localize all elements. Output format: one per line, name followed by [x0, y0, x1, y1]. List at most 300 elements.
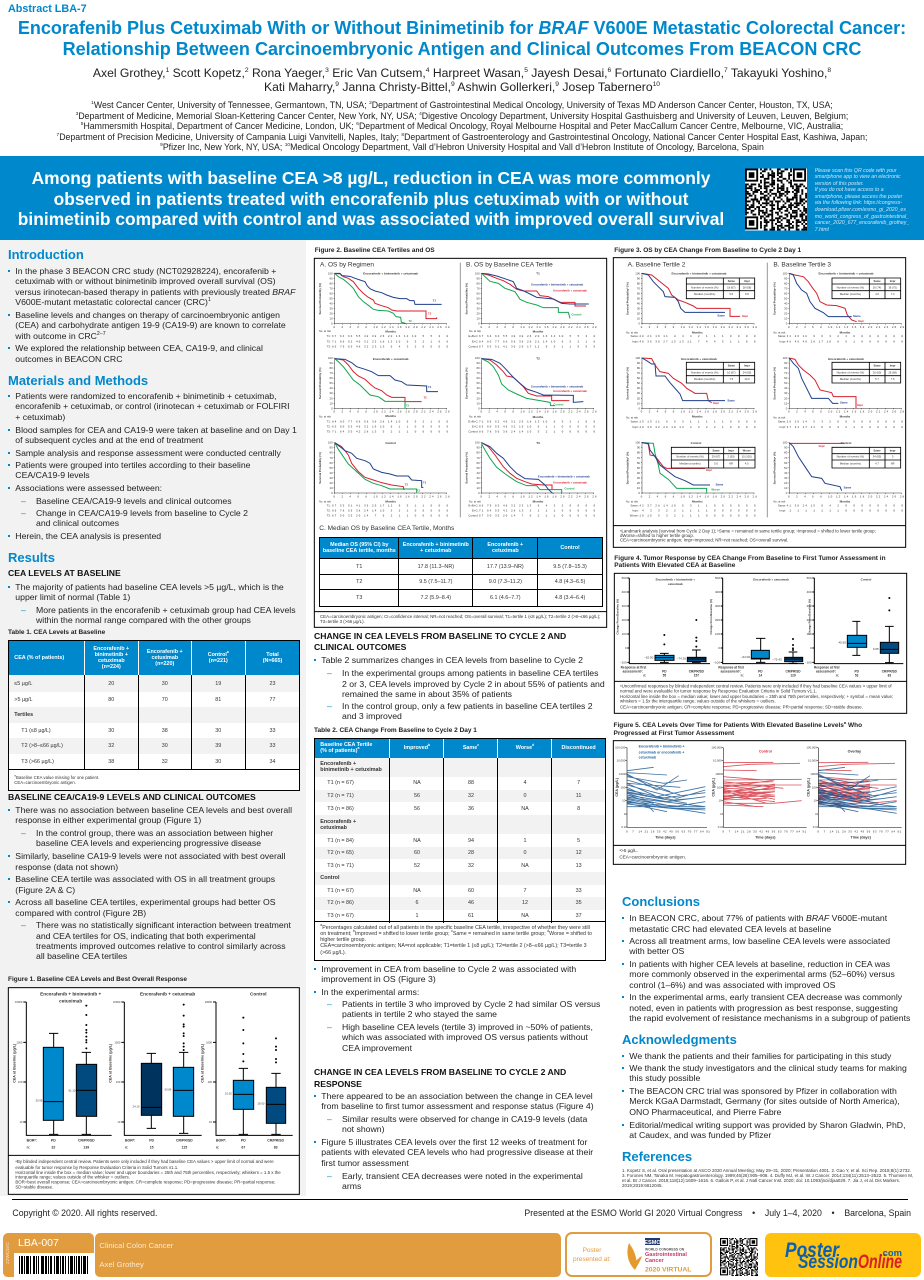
response bullet 1: There appeared to be an association between the change in CEA level [321, 1091, 593, 1101]
chart B3: tertile 3 by regimen: 0 [478, 491, 480, 495]
chart B3: tertile 3 by regimen: E+C: [472, 509, 479, 513]
baseline sub-bullet 1 [36, 828, 273, 849]
Table 1: Encorafenib + [147, 649, 183, 655]
chart A1: encorafenib + binimetinib + cetuximab by tertile: 40 [330, 302, 333, 306]
methods bullet 2: of subsequent cycles and at the end of treatment [15, 435, 203, 445]
acknowledgment bullet 2: We thank the study investigators and the clinical study teams for making [629, 1063, 907, 1073]
Figure 5 panel: 10 [622, 799, 626, 803]
Figure 1: box plots: 1000 [16, 1040, 23, 1044]
Table 1: 19 [215, 681, 221, 687]
chart B1: tertile 1 by regimen: E+C: [472, 339, 479, 343]
Figure 2C table: T1 [356, 564, 362, 570]
chart B2: tertile 2 by regimen: 50 [477, 381, 480, 385]
conclusion bullet 2: Across all treatment arms, low baseline CEA levels were associated [629, 936, 890, 946]
chart B1: tertile 1 by regimen: 90 [477, 276, 480, 280]
chart B3: tertile 3 by regimen: 90 [477, 446, 480, 450]
key message headline: Among patients with baseline CEA >8 µg/L, reduction in CEA was more commonly [32, 168, 710, 188]
chart A3: control by tertile: T3: [327, 514, 331, 518]
chart A2: E+C tertile 2: 70 [637, 371, 640, 375]
acknowledgment bullet 3: The BEACON CRC trial was sponsored by Pfizer in collaboration with [629, 1086, 897, 1096]
subheading: change in CEA and response [314, 1067, 566, 1089]
chart B2: tertile 2 by regimen: 30 [477, 391, 480, 395]
Figure 4 panel: : [642, 670, 643, 674]
chart B3: control tertile 3: (%) [773, 452, 777, 457]
methods bullet 4: Patients were grouped into tertiles according to their baseline [15, 460, 250, 470]
baseline sub-bullet 2: all baseline CEA tertiles [36, 951, 127, 961]
chart B1: tertile 1 by regimen: E+B+C: [468, 334, 479, 338]
chart A2: E+C tertile 2: No. at risk [626, 415, 639, 419]
chart A3: control tertile 2 [625, 441, 758, 518]
chart A1: E+B+C tertile 2: Number of events (%) [691, 285, 718, 289]
chart A1: E+B+C tertile 2: 10 [637, 317, 640, 321]
subheading: CEA levels at baseline: CEA LEVELS AT BASELINE [8, 568, 121, 578]
chart A2: E+C tertile 2: Same [728, 364, 735, 368]
chart B2: tertile 2 by regimen: Survival Probability (%) [465, 367, 469, 399]
reference list: 2019;2019:6812045. [622, 1183, 663, 1188]
chart B2: E+C tertile 3: Survival Probability [773, 373, 777, 400]
chart B2: tertile 2 by regimen: 20 [477, 396, 480, 400]
chart B3: control tertile 3: NR [891, 461, 895, 465]
chart A3: control by tertile: 70 [330, 456, 333, 460]
Table 1: Total [266, 652, 279, 658]
Table 2: 61 [468, 913, 474, 919]
OS sub-bullet 1: patients in tertile 2 who stayed the same [342, 1009, 497, 1019]
Figure 1: box plots: PD [149, 1138, 155, 1142]
intro bullet 3: We explored the relationship between CEA, CA19-9, and clinical [15, 343, 263, 353]
Figure 5 panel: 1 [815, 812, 817, 816]
chart B2: E+C tertile 3: 20 [784, 396, 788, 400]
results bullet 1: upper limit of normal (Table 1) [15, 592, 130, 602]
chart B3: control tertile 3: 4.7 [875, 461, 879, 465]
Table 2: NA [413, 780, 421, 786]
chart B2: tertile 2 by regimen: Encorafenib + binimetinib + cetuximab [531, 385, 583, 389]
Table 2: Encorafenib + [320, 819, 356, 825]
Figure 4 panel: 129 [790, 674, 796, 678]
methods sub-bullet 2: Change in CEA/CA19-9 levels from baseline to Cycle 2 [36, 508, 248, 518]
intro bullet 2: with outcome in CRC2–7 [15, 331, 106, 341]
Table 2: Discontinued [562, 745, 596, 751]
conclusion bullet 4: the rapid evolvement of resistance mechanisms in a subgroup of patients [629, 1013, 910, 1023]
chart A1: E+B+C tertile 2: Impr [744, 279, 750, 283]
chart A3: control by tertile: 20 [330, 481, 333, 485]
intro bullet 1: In the phase 3 BEACON CRC study (NCT02928224), encorafenib + [15, 266, 276, 276]
chart A1: encorafenib + binimetinib + cetuximab by tertile: Encorafenib + binimetinib + cetuximab [363, 272, 418, 276]
chart B1: E+B+C tertile 3: Impr: [780, 339, 786, 343]
chart A3: control by tertile: 30 [330, 476, 333, 480]
footer: congress logo box: Gastrointestinal [645, 1252, 687, 1258]
chart B2: E+C tertile 3: 0 [786, 406, 788, 410]
Figure 5 panel: 1000 [810, 772, 817, 776]
QR instructions: mo_world_congress_of_gastrointestinal_ [815, 214, 909, 220]
Figure 1: box plots: Horizontal line inside the box = median value; lower and upper boundaries = 25th and 75th percentiles, respectively; whiskers = 1.5 x the [15, 1170, 281, 1175]
Figure 1: box plots: 1000 [206, 1040, 213, 1044]
Figure 4 caption: Figure 4. Tumor Response by CEA Change From Baseline to First Tumor Assessment in [614, 555, 886, 562]
response sub-bullet 2: arms [342, 1181, 361, 1191]
chart B3: tertile 3 by regimen: 0 2 4 6 8 10 12 14 16 18 20 22 24 26 28 [480, 495, 598, 498]
chart A1: encorafenib + binimetinib + cetuximab by tertile: T3 [408, 319, 412, 323]
chart A2: encorafenib + cetuximab by tertile: 10 [330, 401, 333, 405]
chart A3: control tertile 2: 60 [637, 461, 640, 465]
Figure 4 panel: assessment [623, 670, 641, 674]
Figure 4 panel: 500 [622, 576, 627, 580]
Table 1: CEA=carcinoembryonic antigen. [14, 780, 76, 785]
Table 2: 1 [523, 838, 526, 844]
chart B3: tertile 3 by regimen: 86 79 65 48 32 23 13 6 4 3 2 0 0 0 0 [476, 505, 596, 508]
Figure 1: box plots: n: [27, 1146, 30, 1150]
chart B2: tertile 2 by regimen: 80 [477, 366, 480, 370]
chart A1: E+B+C tertile 2: 5.6 [729, 292, 734, 296]
chart A2: E+C tertile 2: Median (months) [694, 377, 715, 381]
affiliations: 7Department of Precision Medicine, University of Campania Luigi Vanvitelli, Naples, Italy; 8Department of Gastroenterology and Gastrointestinal Oncology, National Cancer Center Hospital East, Kashiwa, Japan; [57, 132, 867, 142]
chart A2: E+C tertile 2: 80 [637, 366, 640, 370]
chart A3: control tertile 2: No. at risk [626, 500, 639, 504]
Figure 4 panel: −100 [713, 660, 720, 664]
Figure 2 footnote: T3=tertile 3 (>66 µg/L). [320, 619, 365, 624]
Figure 4 panel: normal and were evaluable for tumor response by Response Evaluation Criteria in Solid Tumors v1.1. [620, 689, 817, 694]
Table 1: (N=665) [263, 658, 282, 664]
subheading: change in CEA and clinical outcomes [314, 631, 566, 652]
chart B1: E+B+C tertile 3: Number of events (%) [837, 285, 864, 289]
Figure 4 panel: Response at first [814, 665, 841, 669]
Table 2: 32 [468, 862, 474, 868]
chart A2: encorafenib + cetuximab by tertile: T3: [327, 430, 331, 434]
chart B1: tertile 1 by regimen: 0 2 4 6 8 10 12 14 16 18 20 22 24 26 28 [480, 326, 598, 329]
Figure 4 panel: Unconfirmed responses by blinded independent central review. Patients were only included if they had baseline CEA values > upper limit of [622, 684, 892, 689]
chart A1: encorafenib + binimetinib + cetuximab by tertile: 10 [330, 317, 333, 321]
footer: PosterSessionOnline logo: Session [798, 1252, 858, 1273]
Table 2: on treatment; bImproved = shifted to lower tertile group; cSame = remained in same tertile group; dWorse = shifted to [320, 929, 592, 937]
response sub-bullet 1 [342, 1114, 587, 1135]
chart B2: E+C tertile 3: Median (months) [840, 377, 861, 381]
chart B3: control tertile 3: 41 36 24 15 9 4 2 0 0 0 0 0 0 0 0 [784, 505, 904, 508]
Figure 5 panel: a [619, 848, 621, 852]
chart B2: E+C tertile 3: 37 34 27 21 9 6 3 2 1 0 0 0 0 0 0 [784, 426, 904, 429]
Figure 1: box plots: CR/PR/SD [267, 1138, 284, 1142]
Figure 5 panel: 100 [812, 785, 817, 789]
OS sub-bullet 2: High baseline CEA levels (tertile 3) improved in ~50% of patients, [342, 1022, 593, 1032]
chart A2: E+C tertile 2: Same [727, 398, 735, 402]
footer: PosterSessionOnline logo: Online [858, 1252, 902, 1273]
chart B1: tertile 1 by regimen: Encorafenib + binimetinib + cetuximab [531, 283, 583, 287]
Figure 2C table: Control [560, 545, 580, 551]
footer: PosterSessionOnline logo: .com [880, 1248, 902, 1258]
chart B2: E+C tertile 3 [773, 356, 905, 429]
chart A2: E+C tertile 2: 20 [637, 396, 640, 400]
Figure 4 panel: 0 [718, 646, 720, 650]
intro bullet 2: (CEA) and carbohydrate antigen 19-9 (CA19-9) are known to correlate [15, 320, 286, 330]
Figure 1: box plots: 10000 [113, 1000, 121, 1004]
Table 2: 56 [414, 793, 420, 799]
Figure 4 panel: a [620, 684, 622, 688]
Figure 1: box plots: 100 [116, 1080, 121, 1084]
Figure 4 panel: 0 [625, 646, 627, 650]
chart B1: tertile 1 by regimen: 30 [477, 307, 480, 311]
Figure 1: box plots: 10 [19, 1120, 23, 1124]
Table 2: Baseline CEA Tertile [320, 742, 372, 748]
chart A3: control tertile 2: 100 [635, 441, 640, 445]
Table 2: 37 [576, 913, 582, 919]
Table 1: 33 [270, 743, 276, 749]
chart B3: control tertile 3: 34 (85) [873, 455, 881, 459]
chart A1: E+B+C tertile 2: 50 [637, 297, 640, 301]
Figure 2C table: baseline CEA tertile, months [323, 548, 396, 554]
chart A2: encorafenib + cetuximab by tertile: T2 [423, 396, 427, 400]
footer: congress logo box: Cancer [645, 1258, 665, 1264]
reference list [622, 1168, 913, 1188]
Figure 5 panel: 10,000 [808, 759, 817, 763]
Figure 4 panel: Control [861, 578, 871, 582]
Figure 1: box plots: CEA at Baseline (µg/L) [12, 1043, 16, 1083]
baseline bullet 1: There was no association between baseline CEA levels and best overall [15, 805, 292, 815]
QR instructions: smartphone, please access the poster [815, 194, 902, 200]
heading: Materials and Methods: Materials and Methods [8, 373, 148, 388]
authors: Axel Grothey,1 Scott Kopetz,2 Rona Yaeger,3 Eric Van Cutsem,4 Harpreet Wasan,5 Jayesh Desai,6 Fortunato Ciardiello,7 Takayuki Yoshino,8 [93, 66, 831, 80]
chart A1: E+B+C tertile 2: 8.8 [745, 292, 749, 296]
OS sub-bullet 2: CEA improvement [342, 1043, 412, 1053]
Figure 3 footnote: dWorse=shifted to higher tertile group. [620, 533, 694, 538]
conclusion bullet 1: metastatic CRC had elevated CEA levels at baseline [629, 924, 831, 934]
Figure 5 panel: 0.1 [718, 825, 722, 829]
Table 2: 12 [522, 900, 528, 906]
chart B1: E+B+C tertile 3: Encorafenib + binimetinib + cetuximab [818, 272, 874, 276]
chart A3: control by tertile: Survival Probability (%) [318, 452, 322, 484]
footer: congress logo box: Poster [583, 1247, 602, 1254]
Figure 4 panel: 300 [622, 604, 627, 608]
chart B3: tertile 3 by regimen: 60 [477, 461, 480, 465]
Table 1: >5 µg/L [14, 697, 33, 703]
chart B2: E+C tertile 3: 80 [784, 366, 788, 370]
Figure 1: box plots: 28.00 [258, 1102, 265, 1106]
Table 1: aBaseline CEA value missing for one patient. [14, 773, 99, 780]
chart B2: tertile 2 by regimen: 71 66 62 46 31 25 18 13 10 6 5 2 1 0 0 [476, 420, 596, 423]
chart B3: tertile 3 by regimen [465, 441, 598, 518]
methods sub-bullet 1: Baseline CEA/CA19-9 levels and clinical outcomes [36, 496, 232, 506]
chart A3: control by tertile: 86 78 56 38 24 14 10 5 2 1 0 0 0 0 0 [329, 510, 449, 513]
OS sub-bullet 1 [342, 999, 600, 1020]
panel: left column background [0, 240, 306, 1196]
chart A2: E+C tertile 2: 7.5 [729, 377, 734, 381]
Table 2: T1 (n = 67) [327, 888, 354, 894]
chart B1: E+B+C tertile 3: Survival Probability [773, 289, 777, 315]
chart A1: encorafenib + binimetinib + cetuximab by tertile: No. at risk [319, 329, 332, 333]
Figure 4 panel: 14 [759, 674, 762, 678]
QR instructions: If you do not have access to a [815, 187, 884, 193]
Figure 5 panel: Control [759, 750, 772, 754]
chart A2: E+C tertile 2: Impr [713, 401, 720, 405]
chart A1: encorafenib + binimetinib + cetuximab by tertile: T1 [433, 299, 436, 303]
chart A2: E+C tertile 2: Number of events (%) [691, 370, 718, 374]
response bullet 2: patients with elevated CEA levels who had progressive disease at their [321, 1147, 593, 1157]
Figure 2C table: + cetuximab [420, 548, 451, 554]
chart A1: E+B+C tertile 2 [625, 271, 758, 343]
chart B2: E+C tertile 3: 30 [784, 391, 788, 395]
chart A3: control by tertile: 67 55 51 41 36 29 17 12 9 5 1 1 0 0 0 [329, 505, 449, 508]
chart B1: tertile 1 by regimen [465, 271, 598, 349]
chart B3: control tertile 3: Months [840, 500, 851, 504]
chart B1: tertile 1 by regimen: Control: [468, 345, 479, 349]
chart B1: E+B+C tertile 3: 10 [784, 317, 788, 321]
Figure 4 panel: 400 [807, 590, 812, 594]
Table 2: 0 [523, 793, 526, 799]
chart A3: control tertile 2: 42 37 28 14 10 6 3 1 1 0 0 0 0 0 0 [637, 505, 757, 508]
chart B1: E+B+C tertile 3: 48 46 40 28 17 10 8 6 1 0 0 0 0 0 0 [784, 340, 904, 343]
Figure 1: box plots: PD [51, 1138, 56, 1142]
reference list: et al. Br J Cancer. 2018;118(12):1609–1616. 6. Gallois P, et al. J Natl Cancer Inst. 2020; doi: 10.1093/jnci/djaa029. 7. Jia J, et al. Dis Markers. [622, 1178, 900, 1183]
chart A2: encorafenib + cetuximab by tertile: 90 [330, 361, 333, 365]
chart A3: control by tertile: 67 50 35 20 14 7 6 2 1 1 0 0 0 0 0 [329, 515, 449, 518]
Table 2: 52 [414, 862, 420, 868]
chart A3: control tertile 2: 40 [637, 471, 640, 475]
chart B3: control tertile 3: 0 [892, 455, 894, 459]
Figure 1: box plots: Control [250, 991, 267, 996]
results bullet 1: The majority of patients had baseline CEA levels >5 µg/L, which is the [15, 582, 284, 592]
Figure 1: box plots: 51.00 [225, 1092, 232, 1096]
Table 2: T2 (n = 86) [327, 900, 354, 906]
Figure 4 panel: −75.43 [772, 657, 782, 661]
chart A2: E+C tertile 2: 10 [637, 401, 640, 405]
chart B1: tertile 1 by regimen: 60 [477, 291, 480, 295]
chart A2: encorafenib + cetuximab by tertile: 0 [331, 406, 333, 410]
Figure 1: box plots: CR/PR/SD [176, 1138, 193, 1142]
Table 2: T1 (n = 84) [327, 838, 354, 844]
affiliations [56, 100, 867, 152]
OS sub-bullet 2 [342, 1022, 593, 1053]
Figure 3: landmark Kaplan-Meier charts [612, 257, 906, 548]
Figure 1: box plots: 10 [209, 1120, 213, 1124]
Table 1: 34 [270, 759, 276, 765]
change sub-bullet 1 [342, 668, 605, 699]
chart B2: E+C tertile 3: Impr [857, 403, 864, 407]
chart B3: tertile 3 by regimen: 50 [477, 466, 480, 470]
Figure 4 panel: whiskers = 1.5x the interquartile range; values outside of the whiskers = outliers. [620, 699, 776, 704]
Figure 5 panel: 0 7 14 21 28 35 42 49 56 63 70 77 84 91 [626, 831, 710, 834]
chart B1: tertile 1 by regimen: 67 64 63 55 48 38 26 20 16 14 10 5 5 3 0 [476, 335, 596, 338]
chart A1: encorafenib + binimetinib + cetuximab by tertile: 100 [328, 271, 333, 275]
footer: congress logo box: 2020 VIRTUAL [645, 1266, 691, 1274]
QR instructions: 7.html [815, 227, 829, 233]
Figure 4 panel: a [641, 671, 643, 673]
chart A2: E+C tertile 2: 30 [637, 391, 640, 395]
chart A1: encorafenib + binimetinib + cetuximab by tertile: Survival Probability (%) [318, 283, 322, 314]
Table 2: 36 [468, 806, 474, 812]
chart B2: E+C tertile 3: Number of events (%) [837, 370, 864, 374]
chart A2: encorafenib + cetuximab by tertile: T1 [428, 385, 432, 389]
baseline sub-bullet 2: and CEA tertiles for OS, indicating that both experimental [36, 931, 256, 941]
methods bullet 4 [15, 460, 250, 481]
Table 2: 13 [576, 862, 582, 868]
chart A3: control tertile 2: 10 10 5 3 2 1 1 1 0 0 0 0 0 0 0 [637, 515, 757, 518]
Figure 4 caption: Patients With Elevated CEA at Baseline [614, 562, 735, 569]
chart A1: E+B+C tertile 2: Median (months) [694, 292, 715, 296]
chart B2: tertile 2 by regimen: 65 60 55 46 32 19 10 6 1 1 0 0 0 0 0 [476, 426, 596, 429]
conclusion bullet 1: In BEACON CRC, about 77% of patients with BRAF V600E-mutant [629, 913, 887, 923]
Table 1: 39 [215, 743, 221, 749]
footer: PosterSessionOnline logo [765, 1233, 921, 1277]
Figure 2 footnote: CEA=carcinoembryonic antigen; CI=confidence interval; NR=not reached; OS=overall survival; T1=tertile 1 (≤8 µg/L); T2=tertile 2 (>8–≤66 µg/L); [320, 614, 600, 619]
chart B1: tertile 1 by regimen: 20 [477, 312, 480, 316]
chart B1: E+B+C tertile 3: Months [840, 330, 851, 334]
Figure 5 panel: Overlay [848, 750, 862, 754]
methods bullet 3: Sample analysis and response assessment were conducted centrally [15, 448, 281, 458]
chart A3: control tertile 2: 90 [637, 446, 640, 450]
Table 2: 88 [468, 780, 474, 786]
change sub-bullet 1: 2 or 3, CEA levels improved by Cycle 2 in about 55% of patients and [342, 678, 605, 688]
Figure 1: box plots: interquartile range; values outside of the whisker = outliers. [15, 1175, 130, 1180]
Figure 4 panel: 100 [715, 632, 720, 636]
Figure 2C table: cetuximab [492, 548, 519, 554]
Figure 5 panel: Time (days) [851, 836, 872, 840]
conclusion bullet 4: noted, even in patients with progression as best response, suggesting [629, 1002, 898, 1012]
conclusion bullet 4: In the experimental arms, early transient CEA decrease was commonly [629, 992, 902, 1002]
methods bullet 5: Associations were assessed between: [15, 483, 162, 493]
QR instructions: download.pfizer.com/esmo_gi_2020_es [815, 207, 906, 213]
baseline sub-bullet 2: treatments improved outcomes relative to control similarly across [36, 941, 286, 951]
chart B2: E+C tertile 3: a [774, 371, 776, 373]
Figure 1: box plots: BOR [216, 1138, 224, 1142]
chart B1: tertile 1 by regimen: Encorafenib + cetuximab [553, 288, 587, 292]
reference list: 1. Kopetz S, et al. Oral presentation at ASCO 2020 Annual Meeting; May 29–31, 2020; Presentation 4001. 2. Gao Y, et al. Sci Rep. 2018;8(1):2732. [622, 1168, 911, 1173]
Figure 2: Kaplan-Meier charts: B. OS by Baseline CEA Tertile [466, 262, 553, 269]
chart A1: E+B+C tertile 2: 100 [635, 271, 640, 275]
chart A1: encorafenib + binimetinib + cetuximab by tertile: 80 [330, 281, 333, 285]
Figure 2C table: 6.1 (4.6–7.7) [490, 595, 521, 601]
chart A2: E+C tertile 2: 40 [637, 386, 640, 390]
methods bullet 2 [15, 425, 297, 446]
Table 2: 46 [468, 900, 474, 906]
chart B2: tertile 2 by regimen: Encorafenib + cetuximab [553, 389, 587, 393]
Figure 3 footnote: CEA=carcinoembryonic antigen; Impr=improved; NR=not reached; OS=overall survival. [620, 537, 788, 542]
OS bullet 1: Improvement in CEA from baseline to Cycle 2 was associated with [321, 964, 576, 974]
chart A1: E+B+C tertile 2: 28 (68) [743, 285, 751, 289]
chart B3: control tertile 3: 0 2 4 6 8 10 12 14 16 18 20 22 24 26 28 [788, 495, 905, 498]
key message headline: observed in patients treated with encorafenib plus cetuximab with or without [54, 189, 688, 209]
Table 1: T2 (>8–≤66 µg/L) [21, 743, 63, 749]
chart B1: tertile 1 by regimen: 80 [477, 281, 480, 285]
affiliations: 9Pfizer Inc, New York, NY, USA; 10Medical Oncology Department, Vall d’Hebron University Hospital and Vall d’Hebron Institute of Oncology, Barcelona, Spain [160, 142, 764, 152]
chart B1: E+B+C tertile 3: 70 [784, 286, 788, 290]
Table 2: 11 [576, 793, 581, 799]
Figure 5 panel: 10,000 [617, 759, 626, 763]
chart B2: E+C tertile 3: 0 2 4 6 8 10 12 14 16 18 20 22 24 26 28 [788, 411, 905, 414]
chart A2: E+C tertile 2 [625, 356, 758, 429]
response sub-bullet 2: Early, transient CEA decreases were noted in the experimental [342, 1171, 583, 1181]
footer: congress logo box: WORLD CONGRESS ON [645, 1248, 685, 1252]
Figure 1: box plots: BOR=best overall response; CEA=carcinoembryonic antigen; CR=complete response; PD=progressive disease; PR=partial response; [15, 1180, 275, 1185]
change sub-bullet 2: In the control group, only a few patients in baseline CEA tertiles 2 [342, 701, 593, 711]
QR instructions [814, 168, 909, 233]
chart A2: encorafenib + cetuximab by tertile: 20 [330, 396, 333, 400]
Figure 1: box plots: : [36, 1138, 37, 1142]
Figure 5 panel: >5 µg/L. [621, 848, 638, 853]
intro bullet 3 [15, 343, 263, 364]
chart B2: tertile 2 by regimen: T2 [536, 356, 540, 360]
chart B1: tertile 1 by regimen: 50 [477, 297, 480, 301]
chart B2: tertile 2 by regimen: 90 [477, 361, 480, 365]
chart B3: tertile 3 by regimen: 10 [477, 486, 480, 490]
Figure 4 panel: Encorafenib + binimetinib + [656, 578, 695, 582]
chart A2: E+C tertile 2: 10.0 [744, 377, 750, 381]
presented at: Presented at the ESMO World GI 2020 Virtual Congress • July 1–4, 2020 • Barcelona, Spain [524, 1208, 911, 1218]
Table 2: (>66 µg/L). [320, 950, 346, 956]
chart A1: E+B+C tertile 2: Same [728, 279, 735, 283]
chart B1: E+B+C tertile 3: Impr [890, 279, 896, 283]
Table 2: Encorafenib + [320, 761, 356, 767]
chart A1: E+B+C tertile 2: Same: [630, 334, 639, 338]
QR instructions: Please scan this QR code with your [815, 168, 897, 174]
Figure 5 caption: Progressed at First Tumor Assessment [614, 730, 734, 737]
Figure 4 panel: −74.26 [677, 657, 686, 661]
Figure 4 panel: PD [662, 670, 667, 674]
